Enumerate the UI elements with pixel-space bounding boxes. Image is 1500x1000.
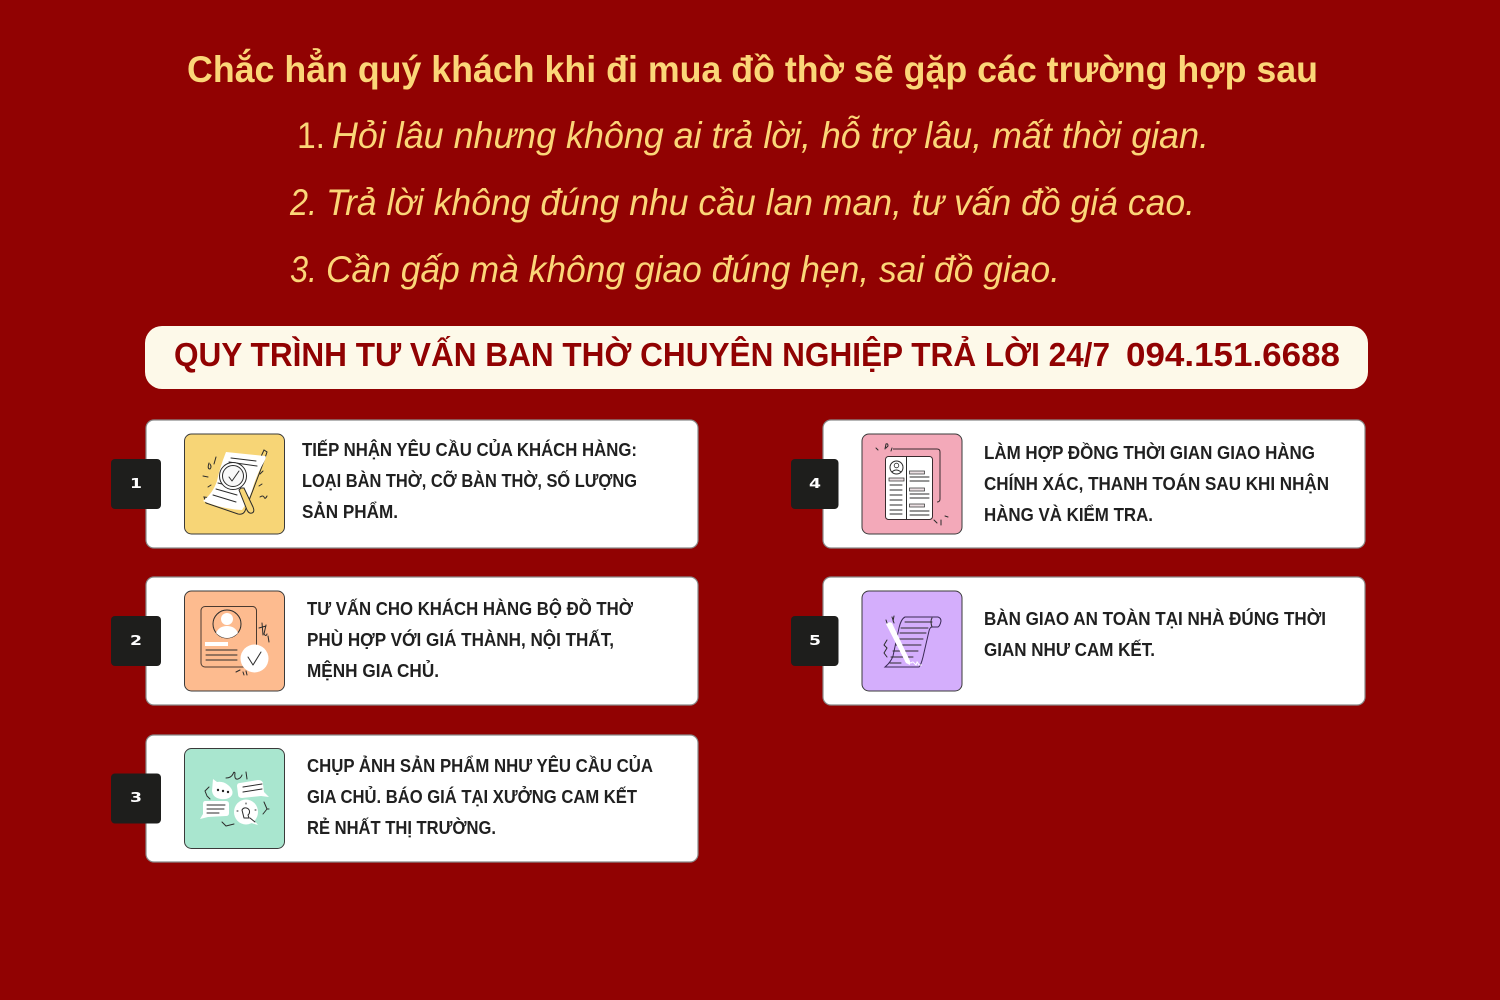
step 2 text: TƯ VẤN CHO KHÁCH HÀNG BỘ ĐỒ THỜ <box>307 598 634 619</box>
step 2 text: PHÙ HỢP VỚI GIÁ THÀNH, NỘI THẤT, <box>307 629 614 650</box>
step 1 text: TIẾP NHẬN YÊU CẦU CỦA KHÁCH HÀNG: <box>302 439 637 460</box>
icon: scroll and pen <box>862 591 962 691</box>
step 5 text <box>984 608 1326 660</box>
step 5 number badge: 5 <box>809 634 821 649</box>
step 4 text: CHÍNH XÁC, THANH TOÁN SAU KHI NHẬN <box>984 473 1329 494</box>
problem list <box>289 115 1209 290</box>
step 3 number badge: 3 <box>130 791 142 806</box>
banner text: 094.151.6688 <box>1126 336 1340 373</box>
icon: speech bubbles <box>184 748 284 848</box>
problem 3: 3. <box>290 249 317 290</box>
step 3 text <box>307 755 653 838</box>
problem 2: Trả lời không đúng nhu cầu lan man, tư vấn đồ giá cao. <box>326 182 1195 223</box>
step 1 number badge <box>111 459 161 509</box>
step 4 number badge: 4 <box>809 477 821 492</box>
step 3 number badge <box>111 774 161 824</box>
step 3 text: GIA CHỦ. BÁO GIÁ TẠI XƯỞNG CAM KẾT <box>307 786 637 807</box>
problem 3: Cần gấp mà không giao đúng hẹn, sai đồ giao. <box>326 249 1060 290</box>
step 4 text <box>984 442 1329 525</box>
step 4 text: LÀM HỢP ĐỒNG THỜI GIAN GIAO HÀNG <box>984 442 1315 463</box>
problem 2: 2. <box>289 182 317 223</box>
title: Chắc hẳn quý khách khi đi mua đồ thờ sẽ gặp các trường hợp sau <box>187 48 1318 90</box>
banner <box>145 326 1368 389</box>
step 1 text: SẢN PHẨM. <box>302 501 398 522</box>
problem 1: 1. <box>297 115 325 156</box>
step 4 text: HÀNG VÀ KIỂM TRA. <box>984 504 1153 525</box>
step 2 text <box>307 598 634 681</box>
step 1 card <box>111 420 698 548</box>
icon: contract document <box>862 434 962 534</box>
step 1 text: LOẠI BÀN THỜ, CỠ BÀN THỜ, SỐ LƯỢNG <box>302 470 637 491</box>
step 4 card <box>791 420 1365 548</box>
problem 1: Hỏi lâu nhưng không ai trả lời, hỗ trợ lâu, mất thời gian. <box>332 115 1209 156</box>
step 4 number badge <box>791 459 838 509</box>
icon: profile card with check <box>184 591 284 691</box>
icon: document with magnifier <box>184 434 284 534</box>
step 2 card <box>111 577 698 705</box>
step 1 number badge: 1 <box>130 477 142 492</box>
step 2 number badge: 2 <box>130 634 142 649</box>
step 5 number badge <box>791 616 838 666</box>
step 5 card <box>791 577 1365 705</box>
step 2 number badge <box>111 616 161 666</box>
step 1 text <box>302 439 637 522</box>
step 3 card <box>111 735 698 862</box>
step 5 text: GIAN NHƯ CAM KẾT. <box>984 639 1155 660</box>
step 3 text: RẺ NHẤT THỊ TRƯỜNG. <box>307 817 496 838</box>
banner text: QUY TRÌNH TƯ VẤN BAN THỜ CHUYÊN NGHIỆP TRẢ LỜI 24/7 <box>174 336 1110 373</box>
step 3 text: CHỤP ẢNH SẢN PHẨM NHƯ YÊU CẦU CỦA <box>307 755 653 776</box>
step 5 text: BÀN GIAO AN TOÀN TẠI NHÀ ĐÚNG THỜI <box>984 608 1326 629</box>
step 2 text: MỆNH GIA CHỦ. <box>307 660 439 681</box>
